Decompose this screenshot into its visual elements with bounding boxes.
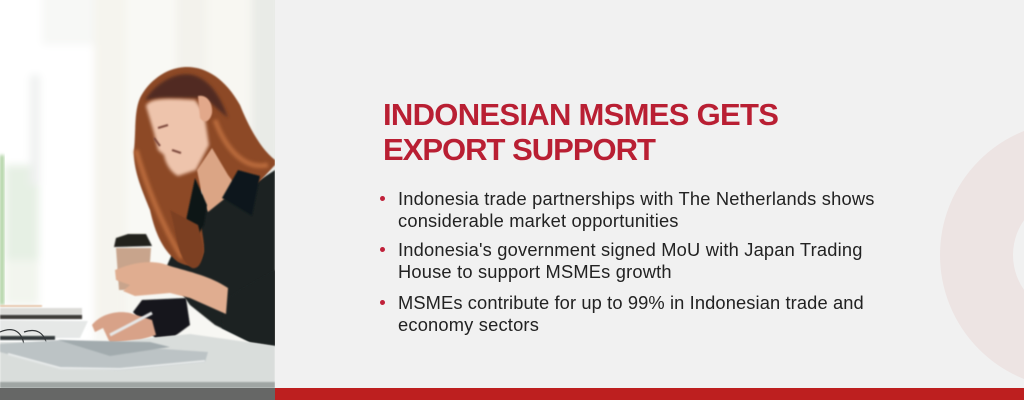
hand and forearm <box>115 262 228 314</box>
hair lock over shirt <box>170 210 203 268</box>
writing hand <box>92 312 156 343</box>
table <box>0 334 275 388</box>
face <box>146 99 209 176</box>
bottom band: red <box>275 388 1024 400</box>
bullet 2: Indonesia's government signed MoU with Japan Trading <box>398 239 863 260</box>
hair <box>134 67 275 266</box>
bullet list <box>380 188 875 335</box>
title: INDONESIAN MSMES GETS <box>383 97 778 132</box>
shirt <box>165 170 275 346</box>
coffee cup <box>116 248 151 290</box>
lower sleeve <box>133 298 190 338</box>
title <box>383 97 778 167</box>
bullet 3 <box>380 292 864 335</box>
laptop, notebook and glasses <box>0 308 82 319</box>
papers on desk <box>0 340 208 370</box>
decorative ring <box>940 131 1024 379</box>
bottom band: grey <box>0 388 275 400</box>
bullet 1 <box>380 188 875 231</box>
title: EXPORT SUPPORT <box>383 132 655 167</box>
bullet 1: Indonesia trade partnerships with The Netherlands shows <box>398 188 875 209</box>
photo: woman with coffee working at a desk <box>0 0 275 388</box>
bullet 3: economy sectors <box>398 314 539 335</box>
bullet 2: House to support MSMEs growth <box>398 261 672 282</box>
bullet 1: considerable market opportunities <box>398 210 679 231</box>
neck and chest <box>197 148 238 212</box>
bullet 3: MSMEs contribute for up to 99% in Indonesian trade and <box>398 292 864 313</box>
eye, nose and mouth <box>154 125 181 153</box>
window plant edge <box>0 155 4 305</box>
bullet 2 <box>380 239 863 282</box>
